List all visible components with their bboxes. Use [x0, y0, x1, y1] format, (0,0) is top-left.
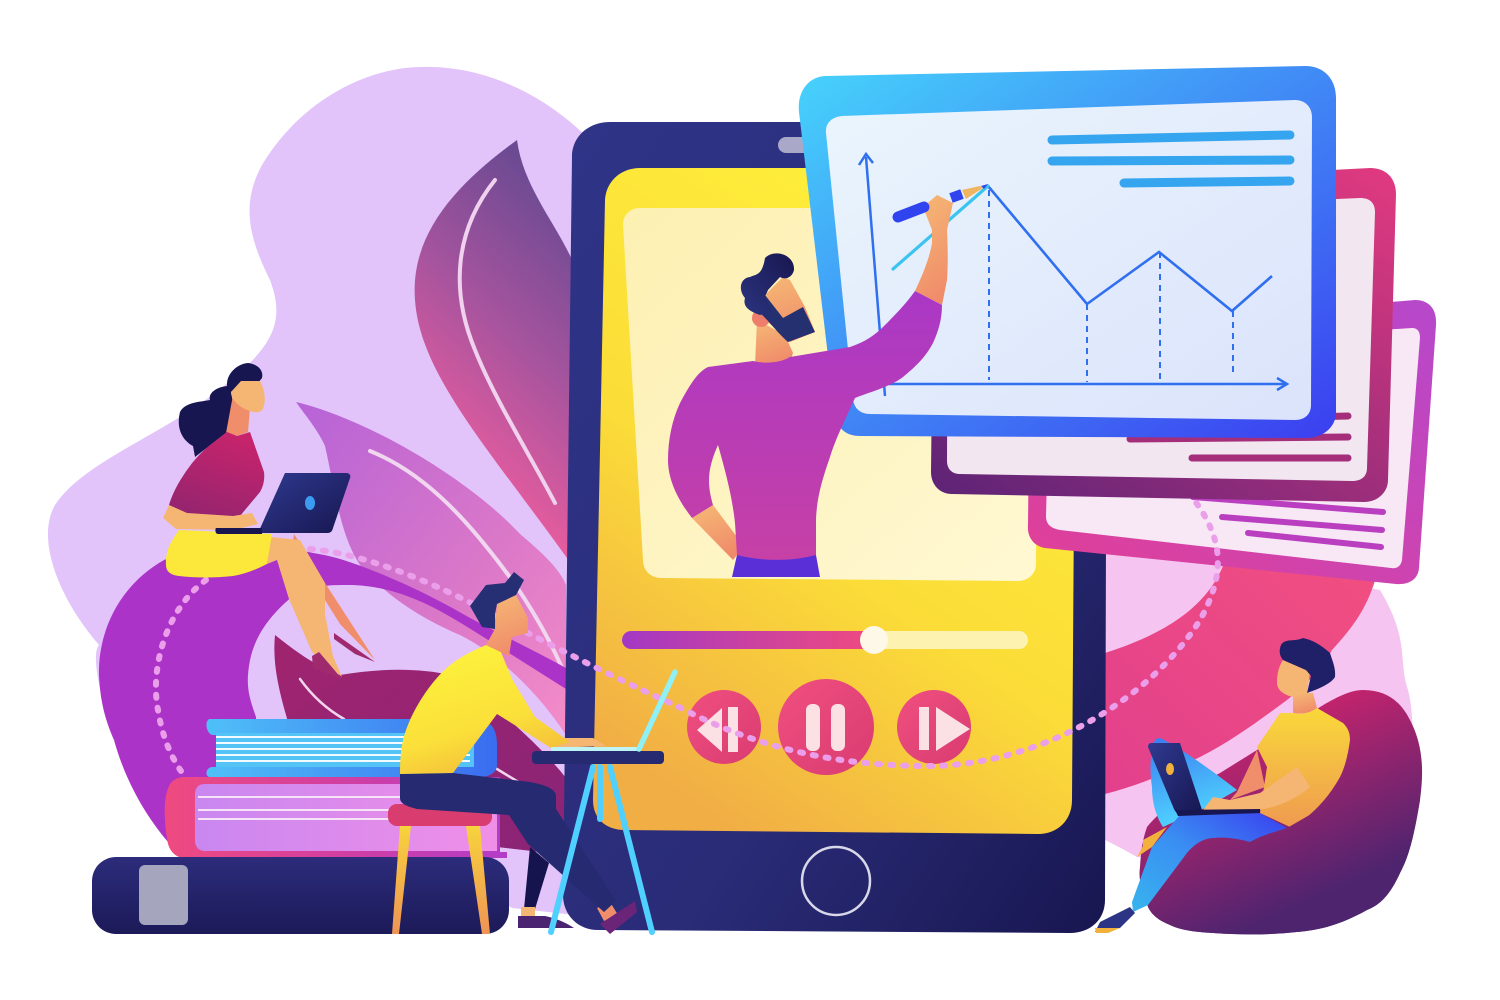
background blob: lilac: [48, 67, 600, 915]
beanbag man face: [1277, 660, 1310, 697]
dotted connection line: [156, 497, 1218, 771]
teacher trousers: [732, 555, 820, 577]
man hair: [470, 572, 524, 629]
man shoe: [518, 916, 574, 928]
card inner panel: [826, 100, 1312, 420]
card border: [799, 66, 1336, 438]
woman back leg: [290, 534, 375, 660]
woman front shoe: [312, 652, 342, 679]
beanbag man back foot: [1137, 827, 1167, 857]
man hand: [551, 738, 606, 748]
card: middle magenta: [931, 168, 1396, 502]
woman top: [169, 432, 264, 516]
woman skirt: [166, 530, 272, 578]
purple swirl stem: [99, 548, 566, 842]
woman face: [231, 381, 265, 412]
man in beanbag: [1095, 638, 1422, 934]
man thigh and shin: [400, 773, 616, 912]
chart line: [988, 186, 1272, 311]
beanbag man front leg: [1132, 813, 1287, 912]
rewind button: [687, 690, 761, 764]
man right shoe: [600, 901, 637, 934]
teacher lower hand: [692, 505, 737, 560]
stool: [388, 804, 492, 934]
teacher hair: [741, 253, 794, 315]
teacher forearm and hand: [915, 195, 953, 305]
beanbag man far arm: [1230, 750, 1265, 800]
beanbag man shoe: [1095, 907, 1135, 932]
tripod desk: [532, 751, 664, 932]
beanbag man torso: [1257, 708, 1350, 827]
pause button: [778, 679, 874, 775]
man laptop: [551, 672, 675, 751]
beanbag back: [1139, 690, 1422, 934]
tablet speaker: [778, 137, 828, 153]
beanbag man back leg: [1150, 738, 1237, 827]
man torso: [400, 645, 570, 774]
chart dashed drop lines: [989, 190, 1233, 382]
teacher beard: [760, 295, 815, 342]
woman arm: [163, 505, 258, 530]
home button: [802, 847, 870, 915]
teacher ear: [752, 309, 770, 327]
beanbag man laptop: [1148, 743, 1203, 813]
middle book: [165, 777, 507, 858]
card: front chart: [799, 66, 1336, 438]
pink ribbon behind tablet: [1105, 530, 1378, 794]
stacked books: [92, 719, 509, 934]
book label: [139, 865, 188, 925]
woman neck: [226, 395, 250, 436]
woman hair: [179, 363, 262, 457]
woman back shoe: [334, 633, 375, 662]
video frame: [623, 208, 1038, 581]
teacher torso and arm: [668, 291, 942, 560]
man on stool with laptop: [388, 572, 675, 934]
beanbag man front arm: [1203, 767, 1310, 810]
teacher: [668, 184, 988, 577]
tablet body: [563, 122, 1107, 933]
beanbag man neck: [1293, 693, 1317, 713]
leaf: large upper: [415, 140, 585, 565]
beanbag man hair: [1280, 638, 1335, 693]
beanbag front lobe: [1148, 800, 1420, 934]
marker pencil: [898, 184, 988, 217]
teacher face: [760, 277, 815, 342]
top book: [206, 719, 497, 777]
teacher neck: [755, 320, 793, 365]
tablet screen: [593, 168, 1076, 834]
tablet: [563, 122, 1107, 933]
chart text lines: [1052, 135, 1290, 183]
woman front leg: [267, 537, 342, 677]
forward button: [897, 690, 971, 764]
man neck and face: [486, 595, 528, 656]
woman laptop: [258, 473, 350, 533]
man back leg: [524, 847, 549, 909]
man ankle: [521, 907, 535, 917]
background blob: pink: [1105, 540, 1413, 860]
leaf: lower dark: [274, 635, 566, 855]
leaf: middle: [296, 402, 566, 735]
chart axes: [859, 154, 1287, 396]
woman with laptop: [163, 363, 375, 679]
player buttons: [687, 679, 971, 775]
progress bar: [622, 626, 1028, 654]
bottom book: [92, 857, 509, 934]
card: back pink: [1028, 300, 1436, 584]
man right ankle: [597, 902, 618, 921]
progress knob: [860, 626, 888, 654]
